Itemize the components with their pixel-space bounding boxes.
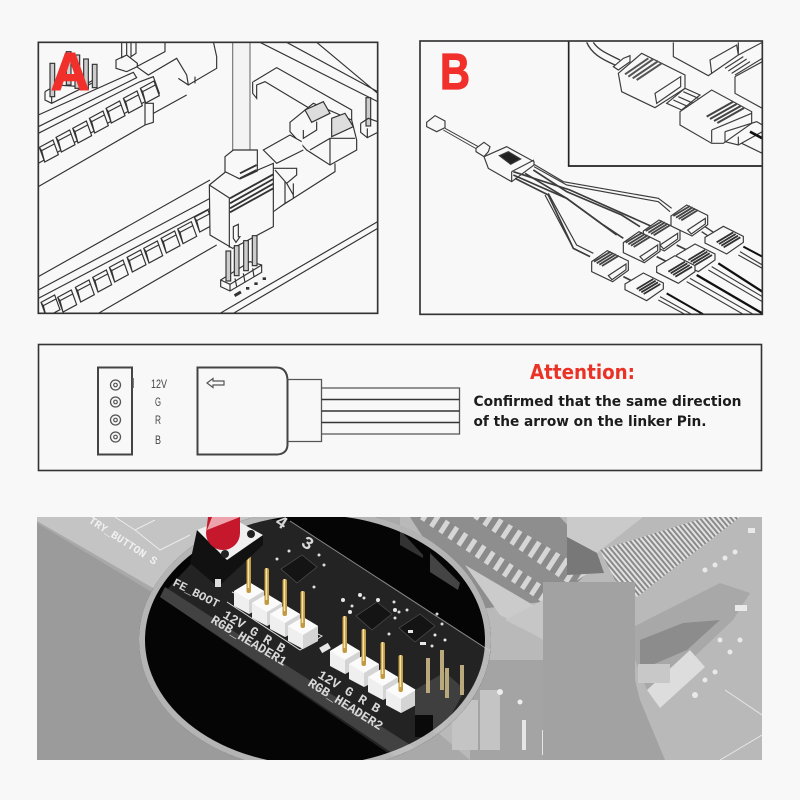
attention note bbox=[474, 394, 742, 430]
RGB header 2 bbox=[330, 616, 416, 713]
magnifier lens bbox=[139, 509, 495, 775]
dark slots in lens bbox=[400, 530, 423, 558]
silkscreen labels: RGB_HEADER1 bbox=[208, 613, 289, 670]
grey band between slots bbox=[410, 517, 600, 610]
pin labels: G bbox=[155, 395, 161, 409]
output wires bbox=[658, 247, 762, 314]
small header pins top-left and top-middle bbox=[45, 42, 137, 103]
pin labels bbox=[151, 377, 167, 447]
silkscreen labels: 3 bbox=[297, 533, 317, 556]
pin labels: R bbox=[155, 413, 161, 427]
panel A: motherboard installation line drawing bbox=[38, 42, 378, 317]
RGB header 1 bbox=[234, 556, 318, 649]
chip top right bbox=[567, 517, 643, 553]
black circuit board bbox=[160, 517, 495, 775]
connector side view bbox=[198, 368, 460, 454]
small white components bbox=[319, 593, 446, 653]
right board area bbox=[400, 517, 762, 760]
top-right board outlines bbox=[253, 42, 378, 120]
right single pin bbox=[361, 98, 378, 138]
push button bbox=[190, 517, 263, 587]
attention note: of the arrow on the linker Pin. bbox=[474, 414, 706, 430]
pin labels: B bbox=[155, 433, 161, 447]
black pin header bbox=[415, 650, 465, 737]
silkscreen labels: 12V G R B bbox=[315, 668, 383, 717]
light latch blocks bbox=[465, 565, 533, 618]
main connector body bbox=[209, 150, 297, 248]
pin markings bbox=[234, 277, 266, 297]
attention note: Confirmed that the same direction bbox=[474, 394, 742, 410]
silkscreen labels: 12V G R B bbox=[220, 608, 288, 657]
right components bbox=[692, 528, 755, 698]
pin socket front view bbox=[98, 368, 133, 454]
panel B letter: B bbox=[440, 43, 470, 100]
photo panel: motherboard RGB headers with magnifier bbox=[37, 509, 762, 775]
four header pins bbox=[221, 236, 262, 291]
silkscreen labels bbox=[170, 512, 386, 734]
lower centre components bbox=[452, 660, 543, 760]
board edge bbox=[160, 587, 415, 765]
chips bbox=[276, 550, 326, 588]
attention heading: Attention: bbox=[530, 360, 635, 384]
large grey latch bbox=[633, 583, 750, 690]
small 4-pin plug bbox=[427, 116, 445, 132]
header 1 pin outline bbox=[227, 592, 322, 650]
silkscreen labels: RGB_HEADER2 bbox=[305, 676, 386, 734]
lower-left flat grey region bbox=[37, 523, 260, 765]
side connector bbox=[263, 102, 357, 165]
lower memory slot bbox=[38, 180, 217, 317]
hub body bbox=[476, 142, 534, 182]
panel A letter: A bbox=[51, 43, 89, 102]
silkscreen labels: FE_BOOT bbox=[170, 576, 221, 611]
split cable bundle bbox=[513, 164, 672, 257]
grey retouch block bbox=[543, 582, 635, 760]
main cable bbox=[233, 42, 250, 153]
upper memory slot bbox=[38, 42, 217, 187]
zoom inset with enlarged connectors bbox=[569, 41, 762, 166]
left board strip bbox=[37, 517, 254, 588]
panel: attention with pinout diagram bbox=[38, 344, 762, 470]
lens ring bbox=[142, 512, 488, 768]
silkscreen labels: 4 bbox=[271, 512, 291, 535]
panel B: splitter cable line drawing bbox=[420, 41, 762, 314]
left board strip: TRY_BUTTON S bbox=[86, 515, 159, 569]
memory slots top right bbox=[417, 517, 545, 603]
plug lead bbox=[443, 128, 478, 149]
connector pairs bbox=[592, 205, 743, 301]
pin labels: 12V bbox=[151, 377, 167, 391]
